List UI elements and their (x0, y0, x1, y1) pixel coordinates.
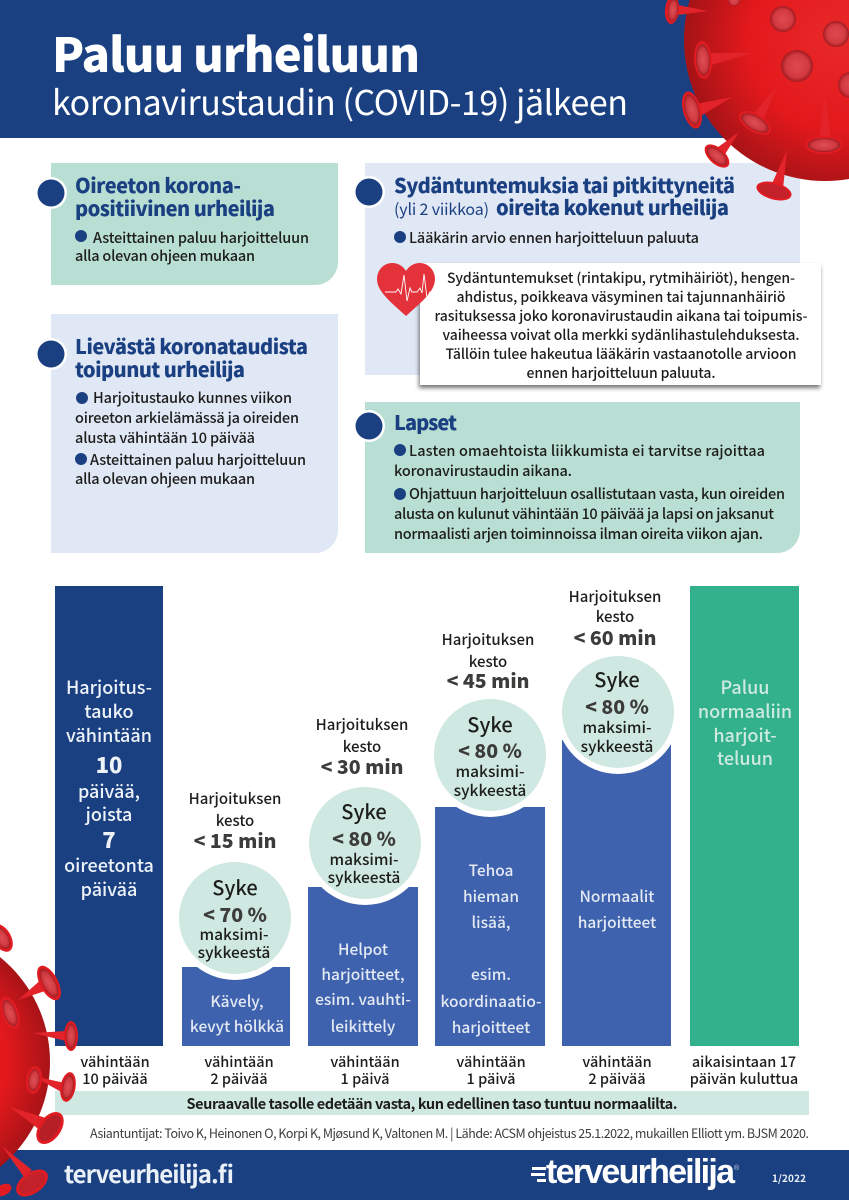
bar: step 4 (556, 586, 680, 1046)
bar: step 4: sykkeestä (581, 735, 653, 757)
callout: heart warning: rasituksessa joko koronavirustaudin aikana tai toipumis- (434, 306, 808, 326)
footer band (0, 1150, 849, 1200)
panel: mild covid recovered athlete: toipunut urheilija (75, 354, 245, 383)
bar: step 3: Tehoa (469, 859, 513, 881)
bar: normal training: Paluu (721, 674, 769, 700)
bar: step 2: maksimi- (330, 848, 398, 870)
panel: asymptomatic athlete: Asteittainen paluu harjoitteluun (93, 227, 309, 248)
bar: step 2: harjoitteet, (321, 963, 405, 985)
title (52, 17, 628, 125)
bar: step 3: esim. (471, 963, 511, 985)
header band (0, 0, 849, 138)
bar: step 4: maksimi- (583, 716, 651, 738)
duration labels: vähintään (80, 1051, 150, 1072)
bar: step 3: sykkeestä (454, 779, 526, 801)
duration labels: 2 päivää (210, 1068, 268, 1089)
bar: step 4: Harjoituksen (569, 586, 661, 607)
bar: step 4: < 60 min (574, 622, 656, 651)
duration labels: 2 päivää (588, 1068, 646, 1089)
bar: step 2: < 30 min (321, 751, 403, 780)
bar: step 2 (303, 714, 427, 1046)
panel: children: Lapset (394, 407, 457, 436)
duration labels: aikaisintaan 17 (692, 1051, 796, 1072)
virus craters top (728, 0, 849, 98)
panel: asymptomatic athlete: Oireeton korona- (75, 170, 241, 199)
panel: asymptomatic athlete (35, 163, 338, 285)
panel: heart symptoms athlete: Lääkärin arvio ennen harjoitteluun paluuta (409, 227, 699, 248)
edition: 1/2022 (772, 1170, 806, 1185)
bar: rest: Harjoitus- (66, 674, 152, 700)
bar: rest: 10 (96, 748, 122, 780)
sources: Asiantuntijat: Toivo K, Heinonen O, Korpi K, Mjøsund K, Valtonen M. | Lähde: ACSM ohjeistus 25.1.2022, mukaillen Elliott ym. BJSM 2020. (90, 1123, 809, 1142)
bar: step 4: Normaalit (580, 885, 654, 907)
duration labels: päivän kuluttua (690, 1068, 798, 1089)
bar: step 2: sykkeestä (328, 866, 400, 888)
duration labels: vähintään (456, 1051, 526, 1072)
logo: ® (734, 1164, 740, 1172)
bar: step 4: kesto (596, 606, 634, 627)
footer url: terveurheilija.fi (64, 1155, 234, 1190)
bar: step 4: Syke (594, 664, 640, 693)
bar: step 3: Syke (467, 709, 513, 738)
panel: children: normaalisti arjen toiminnoissa ilman oireita viikon ajan. (394, 523, 763, 544)
bar: step 2: Helpot (338, 938, 388, 960)
bar: normal training: normaaliin (698, 698, 792, 724)
bar: step 1: Kävely, (210, 990, 264, 1012)
panel: mild covid recovered athlete: Lievästä koronataudista (75, 331, 308, 360)
bar: step 3 (428, 629, 552, 1046)
bar: normal training: teluun (717, 745, 773, 771)
title: Paluu urheiluun (52, 17, 420, 86)
virus spikes top (664, 0, 843, 204)
bar: rest: tauko (84, 698, 134, 724)
panel: mild covid recovered athlete: alusta vähintään 10 päivää (75, 427, 255, 448)
panel: children: Ohjattuun harjoitteluun osallistutaan vasta, kun oireiden (409, 483, 785, 504)
bar: step 3: lisää, (472, 911, 510, 933)
callout: heart warning: Sydäntuntemukset (rintakipu, rytmihäiriöt), hengen- (447, 268, 795, 288)
note strip: Seuraavalle tasolle edetään vasta, kun edellinen taso tuntuu normaalilta. (186, 1093, 678, 1114)
bar: step 3: maksimi- (456, 760, 524, 782)
bar: step 1: sykkeestä (198, 941, 270, 963)
logo: terveurheilija (546, 1153, 736, 1191)
duration labels (80, 1051, 798, 1089)
duration labels: vähintään (330, 1051, 400, 1072)
title: koronavirustaudin (COVID-19) jälkeen (52, 76, 628, 125)
bar: step 3: hieman (463, 885, 519, 907)
bar: rest (55, 586, 163, 1046)
bar: step 1 (173, 788, 297, 1046)
bar: step 3: koordinaatio- (440, 990, 542, 1012)
callout: heart warning (420, 263, 821, 385)
bar: step 1: < 15 min (194, 825, 276, 854)
duration labels: vähintään (582, 1051, 652, 1072)
bar: step 1: < 70 % (203, 899, 267, 928)
bar: step 2: Syke (341, 796, 387, 825)
bar: step 2: Harjoituksen (316, 714, 408, 735)
panel: asymptomatic athlete: positiivinen urheilija (75, 193, 275, 222)
bar: rest: päivää (81, 876, 137, 902)
bar: rest: 7 (102, 823, 116, 855)
panel: mild covid recovered athlete: Harjoitustauko kunnes viikon (93, 387, 292, 408)
callout: heart warning: ennen harjoitteluun paluuta. (526, 363, 716, 383)
panel: mild covid recovered athlete: Asteittainen paluu harjoitteluun (90, 449, 306, 470)
bar: step 1: kesto (216, 810, 254, 831)
panel: mild covid recovered athlete: alla olevan ohjeen mukaan (75, 468, 255, 489)
bar: step 3: harjoitteet (452, 1016, 530, 1038)
duration labels: vähintään (204, 1051, 274, 1072)
bar: step 4: < 80 % (585, 691, 649, 720)
bar: step 1: Harjoituksen (189, 788, 281, 809)
bar: step 2: esim. vauhti- (315, 988, 411, 1010)
bar: step 2: kesto (343, 736, 381, 757)
panel: children: Lasten omaehtoista liikkumista ei tarvitse rajoittaa (409, 440, 765, 461)
bar: step 2: leikittely (331, 1015, 396, 1037)
panel: heart symptoms athlete: Sydäntuntemuksia tai pitkittyneitä (394, 170, 735, 199)
bar: step 1: Syke (212, 872, 258, 901)
bar chart: return-to-sport steps (55, 586, 799, 1046)
panel: heart symptoms athlete: (yli 2 viikkoa) (394, 196, 489, 220)
virus: top right (664, 0, 849, 204)
bar: step 3: Harjoituksen (442, 629, 534, 650)
panel: heart symptoms athlete: oireita kokenut urheilija (496, 192, 729, 221)
callout: heart warning: Tällöin tulee hakeutua lääkärin vastaanotolle arvioon (446, 344, 796, 364)
duration labels: 10 päivää (82, 1068, 148, 1089)
bar: step 3: < 80 % (458, 735, 522, 764)
icon: heart with pulse (377, 263, 441, 316)
panel: children (353, 402, 800, 553)
panel: mild covid recovered athlete (35, 314, 338, 553)
panel: heart symptoms athlete (353, 163, 800, 375)
bar: normal training (690, 586, 799, 1046)
panel: children: alusta on kulunut vähintään 10 päivää ja lapsi on jaksanut (394, 503, 774, 524)
bar: step 1: maksimi- (200, 923, 268, 945)
callout: heart warning: vaiheessa voivat olla merkki sydänlihastulehduksesta. (442, 325, 800, 345)
note strip (55, 1091, 809, 1115)
bar: rest: päivää, (78, 778, 140, 804)
bar: step 1: kevyt hölkkä (190, 1015, 284, 1037)
bar: rest: vähintään (66, 722, 152, 748)
bar: step 4: harjoitteet (578, 911, 656, 933)
bar: step 2: < 80 % (332, 823, 396, 852)
bar: rest: joista (85, 801, 132, 827)
duration labels: 1 päivä (467, 1068, 515, 1089)
bar: rest: oireetonta (64, 852, 154, 878)
duration labels: 1 päivä (341, 1068, 389, 1089)
panel: children: koronavirustaudin aikana. (394, 460, 572, 481)
callout: heart warning: ahdistus, poikkeava väsyminen tai tajunnanhäiriö (456, 287, 786, 307)
panel: mild covid recovered athlete: oireeton arkielämässä ja oireiden (75, 407, 299, 428)
virus: bottom left (0, 921, 78, 1200)
panel: asymptomatic athlete: alla olevan ohjeen mukaan (75, 245, 255, 266)
bar: step 3: kesto (469, 651, 507, 672)
bar: normal training: harjoit- (713, 722, 777, 748)
bar: step 3: < 45 min (447, 665, 529, 694)
